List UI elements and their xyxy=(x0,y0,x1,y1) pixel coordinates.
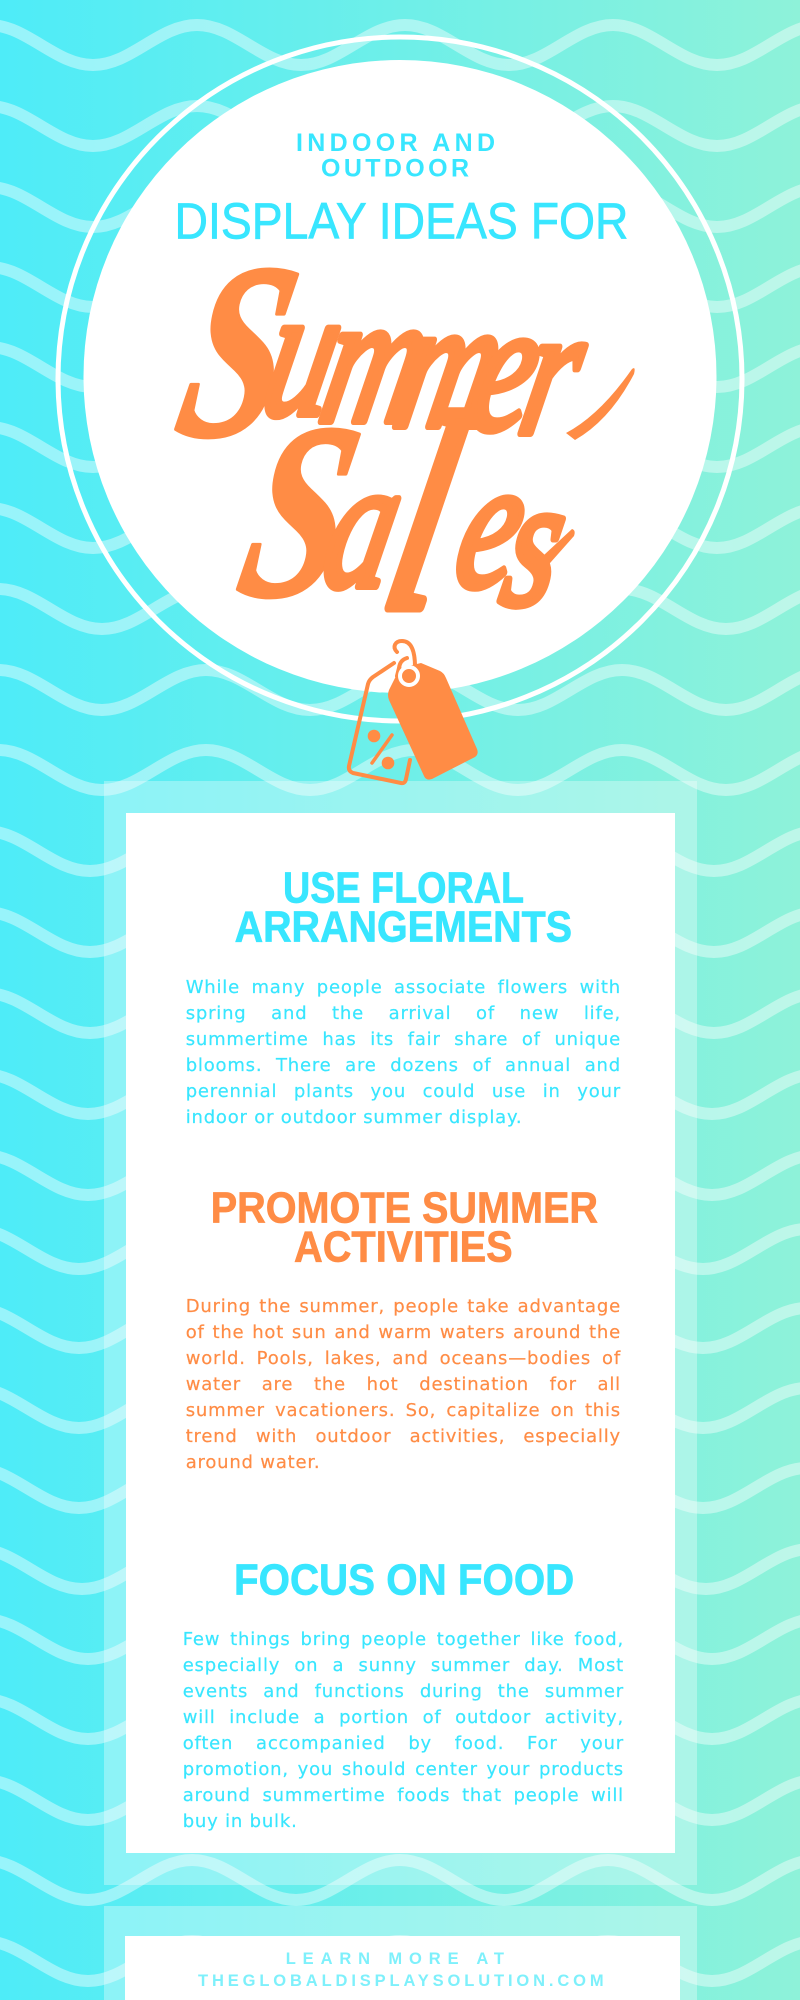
title: display ideas for: DISPLAY IDEAS FOR xyxy=(174,192,628,250)
text block: activities body: summer vacationers. So, capitalize on this xyxy=(186,1400,621,1420)
title: script word summer: S xyxy=(160,212,319,489)
text block: food body: events and functions during the summer xyxy=(183,1681,624,1702)
heading: focus on food: FOCUS ON FOOD xyxy=(234,1556,574,1604)
text block: floral body: blooms. There are dozens of annual and xyxy=(186,1054,621,1076)
text block: floral body xyxy=(186,976,621,1128)
panel: use floral arrangements xyxy=(186,865,621,1128)
title: indoor and outdoor: INDOOR AND xyxy=(296,129,495,157)
text block: activities body: world. Pools, lakes, and oceans—bodies of xyxy=(186,1348,621,1368)
panel: promote summer activities xyxy=(186,1184,621,1472)
title: script word sales: s xyxy=(488,438,584,645)
footer: learn more link xyxy=(198,1950,604,1990)
text block: food body xyxy=(183,1629,624,1832)
title block xyxy=(160,129,635,786)
heading: use floral arrangements: USE FLORAL xyxy=(283,865,524,913)
text block: floral body: perennial plants you could use in your xyxy=(186,1080,621,1102)
text block: floral body: indoor or outdoor summer display. xyxy=(186,1106,522,1128)
text block: activities body: around water. xyxy=(186,1452,320,1472)
footer: learn more link: THEGLOBALDISPLAYSOLUTION.COM xyxy=(198,1972,604,1990)
title: script word summer xyxy=(160,212,635,489)
panel: focus on food xyxy=(183,1556,624,1832)
text block: food body: around summertime foods that people will xyxy=(183,1785,624,1806)
text block: food body: often accompanied by food. For your xyxy=(183,1733,624,1754)
text block: activities body: of the hot sun and warm waters around the xyxy=(186,1322,621,1342)
heading: promote summer activities: PROMOTE SUMMER xyxy=(211,1184,598,1232)
text block: food body: Few things bring people together like food, xyxy=(183,1629,624,1650)
text block: floral body: summertime has its fair share of unique xyxy=(186,1028,621,1050)
title: script word sales: S xyxy=(221,372,380,649)
text block: food body: especially on a sunny summer day. Most xyxy=(183,1655,624,1676)
text block: floral body: While many people associate flowers with xyxy=(186,976,621,998)
text block: activities body xyxy=(186,1296,621,1472)
title: script word sales xyxy=(217,357,602,668)
heading: promote summer activities xyxy=(211,1184,598,1270)
footer: learn more link: LEARN MORE AT xyxy=(286,1950,504,1968)
title: script word summer: ummer xyxy=(245,248,607,474)
title: script word sales: l xyxy=(365,357,487,668)
text block: food body: promotion, you should center your products xyxy=(183,1759,624,1780)
icon: price tags with percent sign xyxy=(349,641,478,783)
text block: activities body: During the summer, people take advantage xyxy=(186,1296,621,1316)
text block: food body: buy in bulk. xyxy=(183,1811,298,1832)
text block: floral body: spring and the arrival of new life, xyxy=(186,1002,621,1024)
title: indoor and outdoor: OUTDOOR xyxy=(321,154,469,182)
text block: activities body: trend with outdoor activities, especially xyxy=(186,1426,621,1446)
text block: food body: will include a portion of outdoor activity, xyxy=(183,1707,624,1728)
title: script word sales: a xyxy=(309,420,420,627)
heading: use floral arrangements xyxy=(235,865,572,950)
title: indoor and outdoor xyxy=(296,129,495,182)
title: script word sales: e xyxy=(441,420,545,627)
text block: activities body: water are the hot destination for all xyxy=(186,1374,621,1394)
